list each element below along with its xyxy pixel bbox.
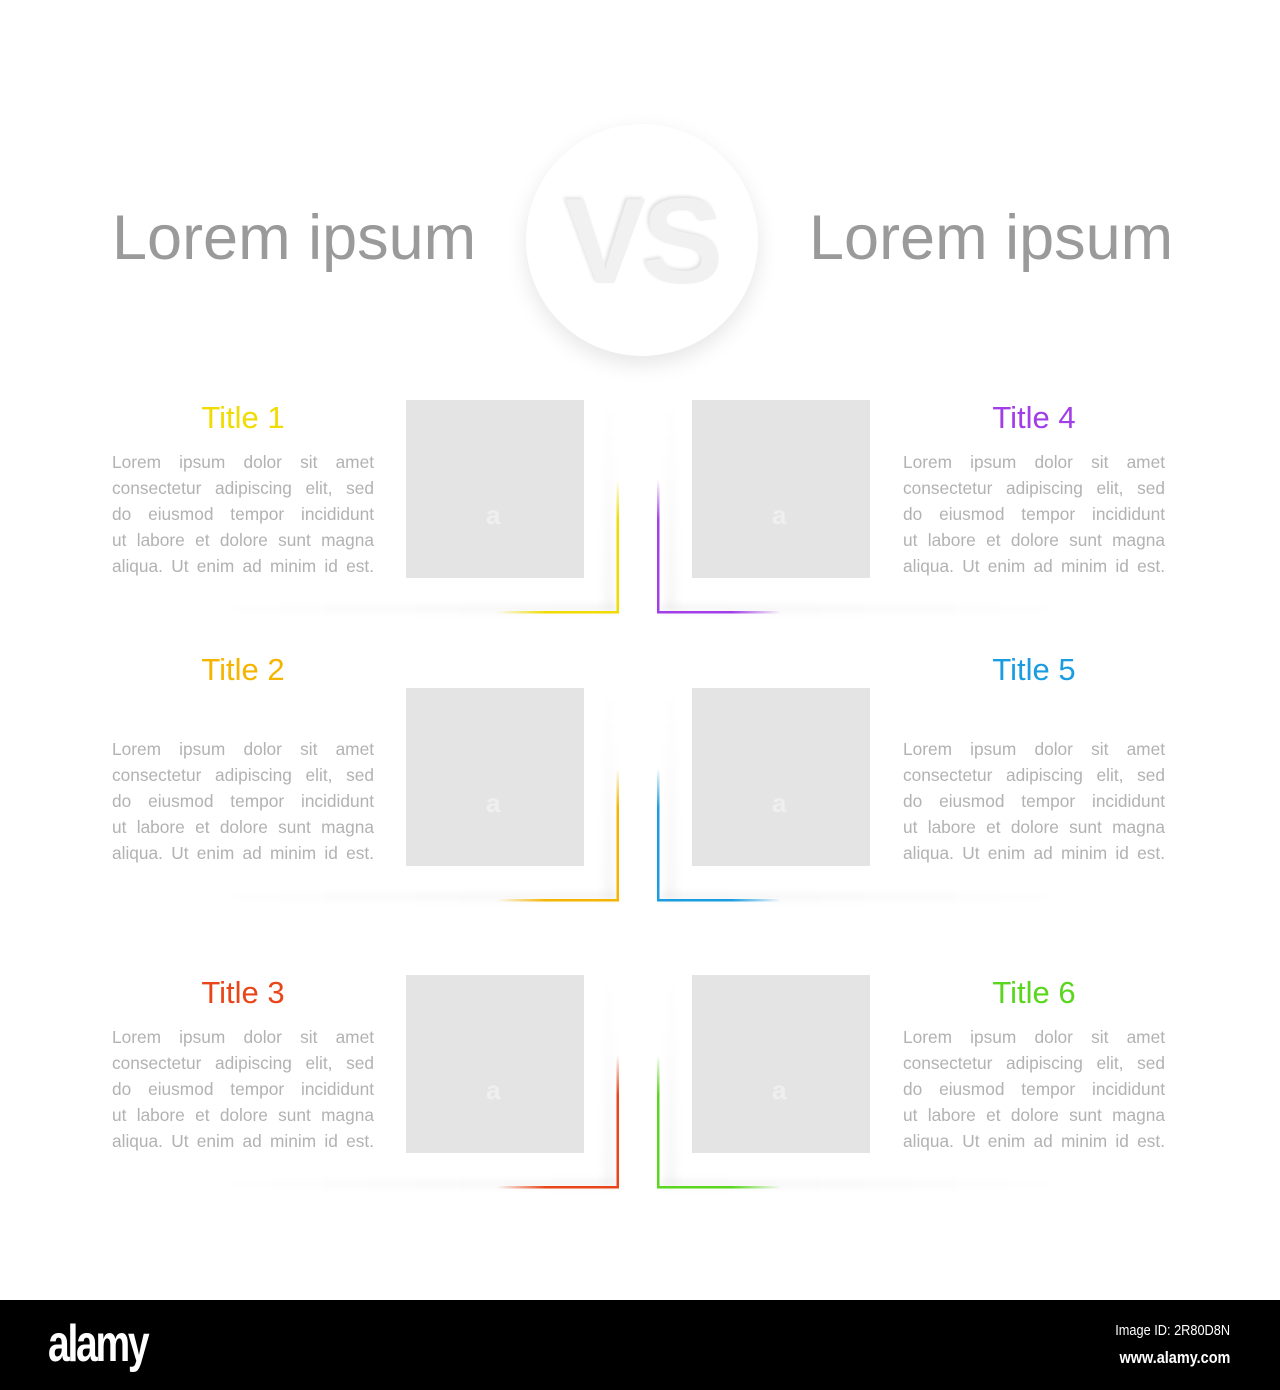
heading right: Lorem ipsum [809,203,1173,273]
image placeholder [406,400,584,578]
text: ut labore et dolore sunt magna [112,1105,374,1125]
heading left: Lorem ipsum [112,203,476,273]
panel: title 4 [657,400,1165,614]
corner accent [657,770,779,902]
title: Title 4 [992,400,1076,435]
text: aliqua. Ut enim ad minim id est. [112,1131,374,1151]
text [112,1027,374,1151]
text: Lorem ipsum dolor sit amet [903,452,1165,472]
text: aliqua. Ut enim ad minim id est. [903,843,1165,863]
panel: title 3 [112,975,619,1188]
text: do eiusmod tempor incididunt [903,504,1165,524]
text: aliqua. Ut enim ad minim id est. [903,556,1165,576]
text: do eiusmod tempor incididunt [112,504,374,524]
image id: Image ID: 2R80D8N [1115,1322,1230,1339]
text [903,1027,1165,1151]
panel: title 1 [112,400,619,614]
image placeholder: a [486,500,500,530]
url: www.alamy.com [1119,1348,1230,1367]
vs circle [526,124,758,356]
text: consectetur adipiscing elit, sed [903,1053,1165,1073]
corner accent [498,770,619,902]
title: Title 5 [992,652,1076,687]
corner accent [498,482,619,614]
text: consectetur adipiscing elit, sed [112,765,374,785]
text: Lorem ipsum dolor sit amet [112,452,374,472]
footer bar [0,1300,1280,1390]
text: Lorem ipsum dolor sit amet [903,1027,1165,1047]
text: Lorem ipsum dolor sit amet [903,739,1165,759]
panel: title 5 [657,652,1165,902]
text: aliqua. Ut enim ad minim id est. [112,843,374,863]
text: consectetur adipiscing elit, sed [112,478,374,498]
logo: alamy [48,1315,147,1373]
text: ut labore et dolore sunt magna [903,1105,1165,1125]
image placeholder [406,975,584,1153]
image placeholder: a [486,788,500,818]
text: do eiusmod tempor incididunt [903,791,1165,811]
text: do eiusmod tempor incididunt [112,1079,374,1099]
title: Title 2 [201,652,285,687]
text [903,739,1165,863]
text: consectetur adipiscing elit, sed [112,1053,374,1073]
text: consectetur adipiscing elit, sed [903,478,1165,498]
text: ut labore et dolore sunt magna [112,817,374,837]
image placeholder [692,975,870,1153]
corner accent [499,1056,619,1188]
panel: title 6 [657,975,1165,1188]
text [112,452,374,576]
corner accent [657,1056,779,1188]
title: Title 6 [992,975,1076,1010]
text: do eiusmod tempor incididunt [112,791,374,811]
image placeholder: a [486,1075,500,1105]
corner accent [657,482,779,614]
text: Lorem ipsum dolor sit amet [112,1027,374,1047]
title: Title 3 [201,975,285,1010]
text [112,739,374,863]
text [903,452,1165,576]
text: Lorem ipsum dolor sit amet [112,739,374,759]
image placeholder: a [772,500,786,530]
image placeholder [692,688,870,866]
text: aliqua. Ut enim ad minim id est. [903,1131,1165,1151]
panel: title 2 [112,652,619,902]
image placeholder: a [772,1075,786,1105]
text: ut labore et dolore sunt magna [903,817,1165,837]
image placeholder: a [772,788,786,818]
vs text: VS [565,173,719,309]
image placeholder [692,400,870,578]
text: do eiusmod tempor incididunt [903,1079,1165,1099]
text: consectetur adipiscing elit, sed [903,765,1165,785]
text: ut labore et dolore sunt magna [903,530,1165,550]
text: aliqua. Ut enim ad minim id est. [112,556,374,576]
title: Title 1 [201,400,285,435]
text: ut labore et dolore sunt magna [112,530,374,550]
image placeholder [406,688,584,866]
